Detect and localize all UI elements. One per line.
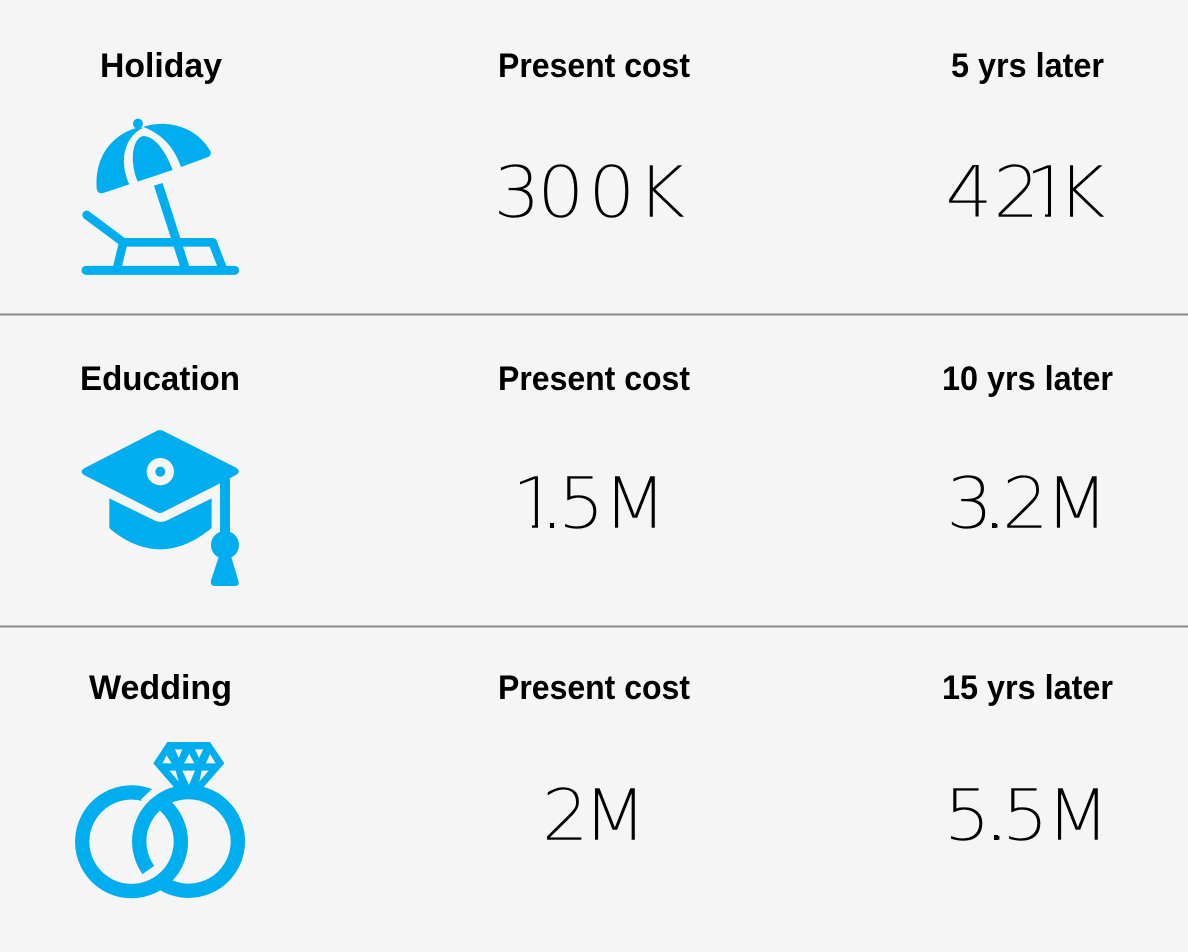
icon: graduation cap: [82, 430, 239, 586]
value: present cost 2M: 2M: [542, 775, 647, 858]
icon: wedding rings with diamond: [82, 742, 238, 891]
row: education: [80, 360, 1113, 586]
value: present cost 1.5M: 1.5M: [512, 463, 667, 546]
value: 10 yrs later 3.2M: 3.2M: [946, 463, 1109, 546]
column heading: present cost: Present cost: [498, 669, 690, 707]
heading: Holiday: Holiday: [100, 47, 222, 85]
column heading: present cost: Present cost: [498, 47, 690, 85]
icon: beach umbrella and lounger: [86, 119, 235, 270]
column heading: 10 yrs later: 10 yrs later: [942, 360, 1113, 398]
heading: Wedding: Wedding: [89, 669, 232, 707]
row: holiday: [86, 47, 1106, 270]
row: wedding: [82, 669, 1113, 891]
column heading: 5 yrs later: 5 yrs later: [951, 47, 1104, 85]
value: 5 yrs later 421K: 421K: [945, 152, 1106, 235]
column heading: present cost: Present cost: [498, 360, 690, 398]
heading: Education: Education: [80, 360, 240, 398]
value: present cost 300K: 300K: [493, 152, 685, 235]
value: 15 yrs later 5.5M: 5.5M: [944, 775, 1110, 858]
column heading: 15 yrs later: 15 yrs later: [942, 669, 1113, 707]
